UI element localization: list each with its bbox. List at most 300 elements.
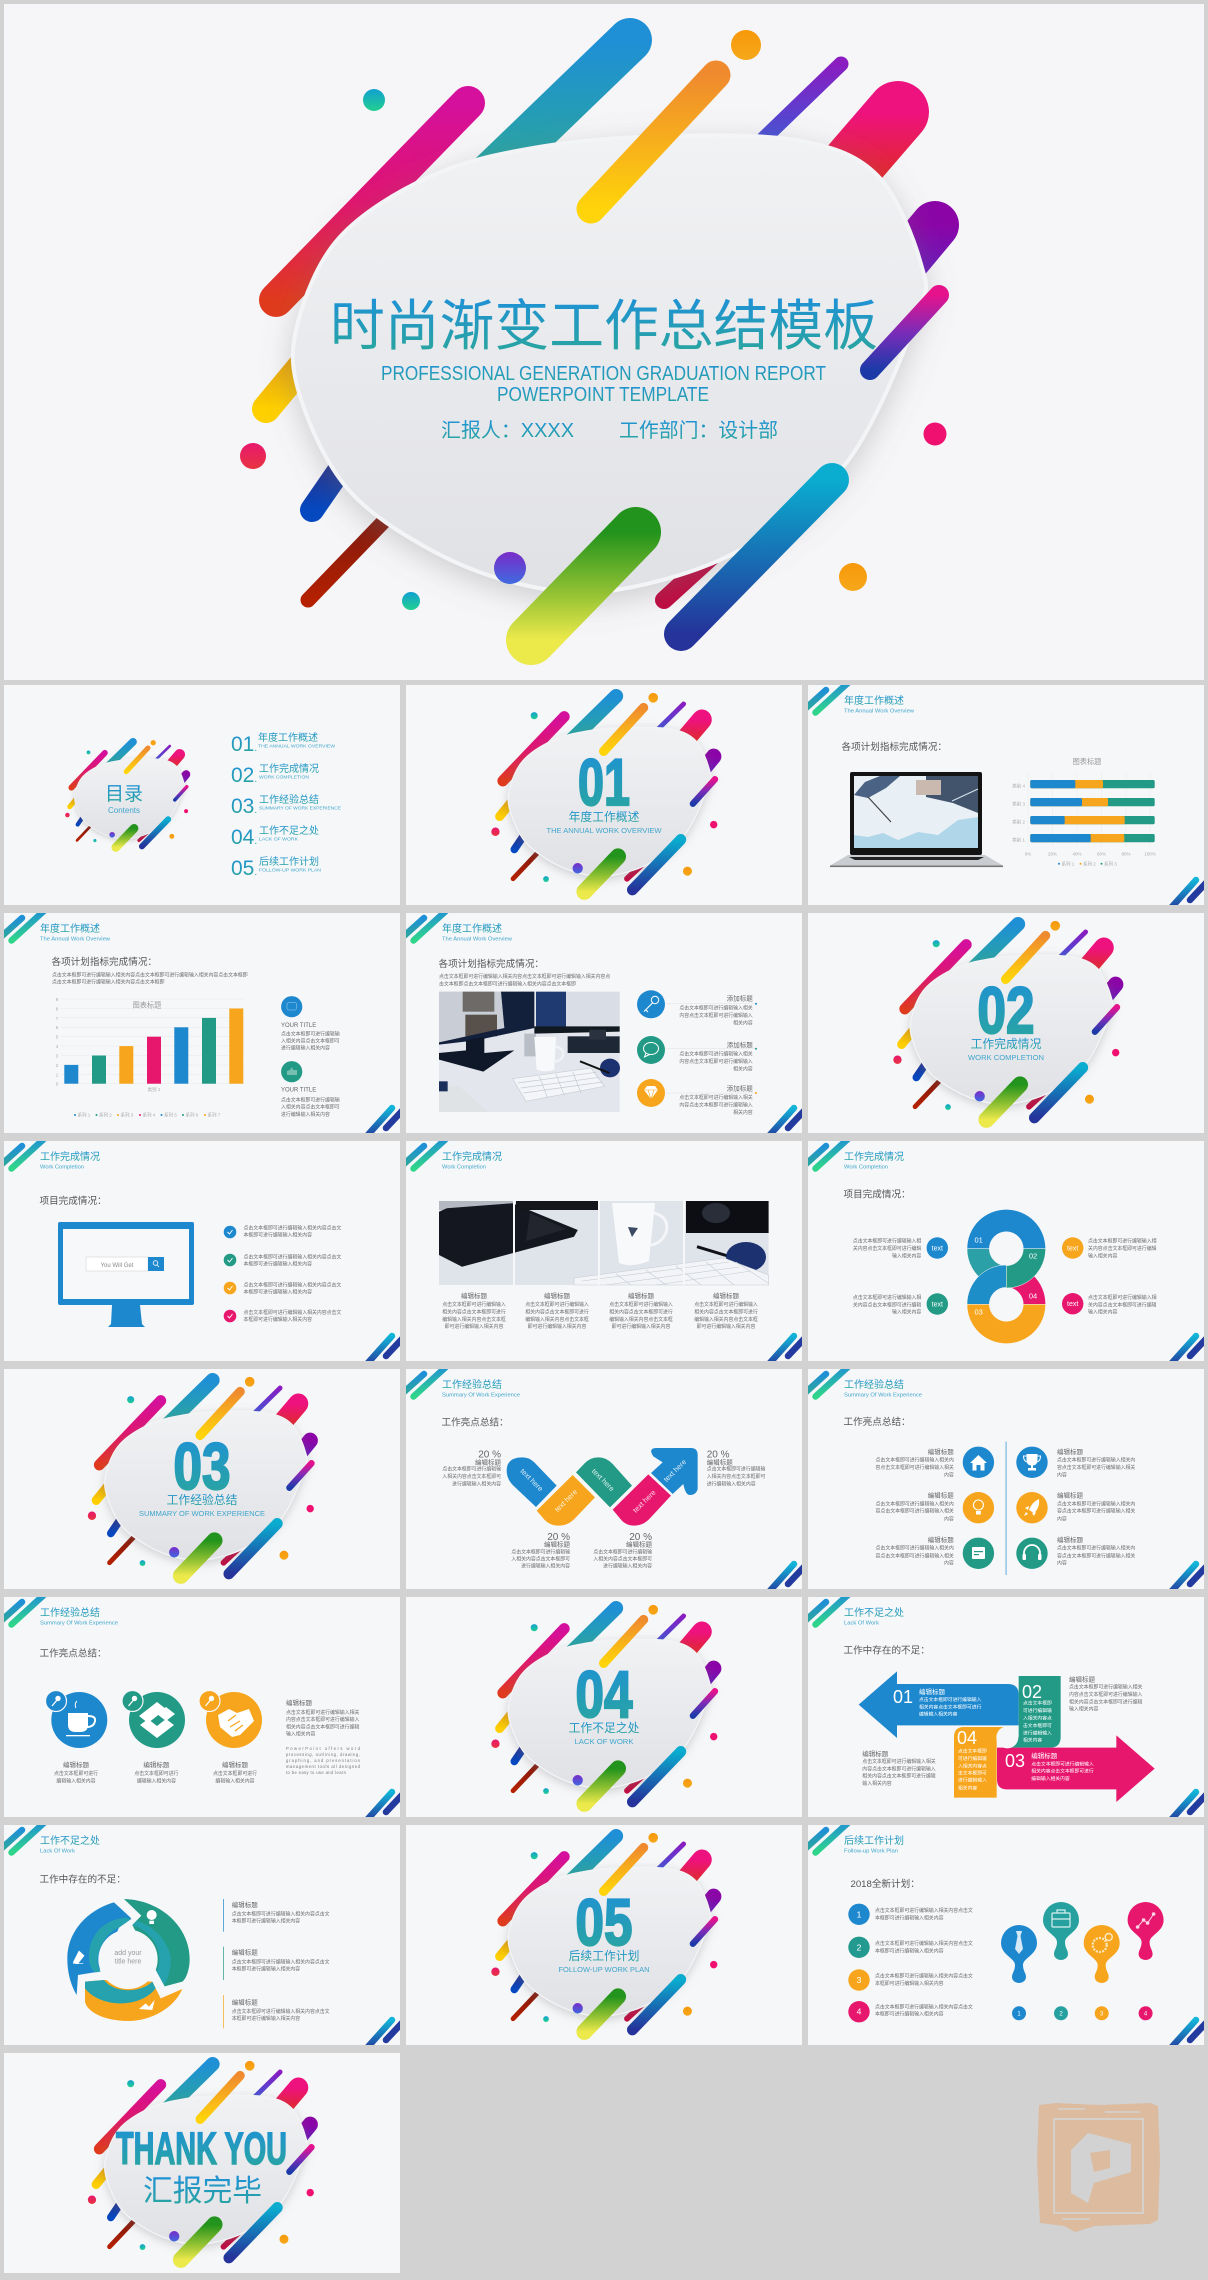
callout: bottom left: text	[932, 1302, 943, 1308]
text block: your title 2: YOUR TITLE	[281, 1088, 316, 1094]
footer stripes	[366, 1792, 402, 1821]
header text	[40, 1606, 118, 1626]
caption column 4	[694, 1291, 758, 1330]
cover subtitle line 1: PROFESSIONAL GENERATION GRADUATION REPORT	[381, 363, 826, 385]
intro text: 点击文本框即可进行编辑输入相关内容点击文本框即	[52, 979, 165, 986]
header text	[844, 1606, 904, 1626]
item 3: diamond icon and text: 点击文本框即可进行编辑输入相关	[679, 1094, 753, 1101]
item 3: diamond icon and text: 添加标题	[727, 1083, 753, 1092]
footer stripes	[366, 1108, 402, 1137]
icon: open box with key badge	[122, 1690, 185, 1748]
interlocking arrows	[859, 1671, 1155, 1802]
plan item 3: 3	[857, 1975, 862, 1985]
balloon 1: tie	[1001, 1925, 1037, 1983]
figure eight ring chart	[967, 1209, 1046, 1344]
plan item 1: 本框即可进行编辑输入相关内容	[875, 1914, 944, 1921]
callout: bottom 20%	[511, 1532, 570, 1570]
section subtitle: FOLLOW-UP WORK PLAN	[558, 1965, 650, 1974]
footer stripes	[768, 1564, 804, 1593]
panel: cycle diagram slide	[2, 1821, 402, 2049]
header text: Work Completion	[844, 1164, 888, 1170]
header text: Work Completion	[40, 1164, 84, 1170]
monitor with search box: You Will Get	[101, 1263, 134, 1269]
panel: figure eight slide	[806, 1137, 1206, 1365]
text block: your title 2	[281, 1088, 340, 1118]
text block 2: 本框即可进行编辑输入相关内容	[232, 1965, 300, 1972]
item 1: key icon and text: 内容点击文本框即可进行编辑输入	[679, 1012, 753, 1019]
text block: your title 1	[281, 1023, 340, 1052]
arrow 03 text: 相关内容点击文本框即可进行	[1031, 1768, 1094, 1775]
caption 2: 编辑输入相关内容	[137, 1778, 176, 1784]
checklist items: 点击文本框即可进行编辑输入相关内容点击文	[244, 1224, 341, 1232]
column chart: 5	[56, 1035, 59, 1040]
item right 1: trophy: 点击文本框即可进行编辑输入相关内	[1057, 1457, 1135, 1464]
item left 2: bulb: 点击文本框即可进行编辑输入相关内	[876, 1501, 954, 1508]
callout: top left 20%: 编辑标题	[475, 1457, 502, 1466]
item 3: diamond icon and text: 相关内容	[733, 1109, 753, 1116]
item 2: chat icon and text: 添加标题	[727, 1040, 753, 1049]
heading: 2018全新计划：	[850, 1878, 920, 1890]
stacked bar chart	[1012, 773, 1156, 868]
callout: bottom right: 输入相关内容	[1088, 1309, 1117, 1316]
text block lower left	[862, 1749, 936, 1787]
W-shaped arrow diagram: text here	[553, 1487, 579, 1514]
contents list: 01.	[231, 733, 257, 756]
center divider	[1005, 1442, 1007, 1575]
contents list: FOLLOW-UP WORK PLAN	[259, 868, 321, 872]
item right 2: rocket: 内容	[1057, 1516, 1067, 1523]
stacked bar chart: 系列 2	[1083, 860, 1096, 868]
caption 3: 点击文本框即可进行	[213, 1770, 257, 1777]
right text block	[286, 1698, 359, 1738]
column chart: 4	[56, 1044, 59, 1049]
stacked bar chart: 80%	[1121, 852, 1131, 857]
panel: column chart slide	[2, 909, 402, 1137]
column chart: 9	[56, 997, 59, 1002]
panel: section 05	[406, 1825, 802, 2045]
callout: bottom left	[853, 1293, 948, 1316]
text block 1: 本框即可进行编辑输入相关内容	[232, 1918, 300, 1925]
text block upper right: 编辑标题	[1069, 1675, 1096, 1684]
footer stripes	[1170, 1336, 1206, 1365]
right text block: 内容点击文本框即可进行编辑输入	[286, 1716, 359, 1723]
header text: Lack Of Work	[844, 1620, 879, 1626]
caption 2: 点击文本框即可进行	[134, 1770, 179, 1777]
item left 3: calendar: 容点击文本框即可进行编辑输入相关	[876, 1552, 954, 1559]
right text block: 编辑标题	[286, 1698, 312, 1707]
callout: bottom right	[1062, 1293, 1157, 1316]
panel: six icons slide	[806, 1365, 1206, 1593]
arrow 01 text: 编辑标题	[919, 1687, 946, 1696]
checklist items: 点击文本框即可进行编辑输入相关内容点击文	[244, 1282, 341, 1288]
cover title: 时尚渐变工作总结模板	[330, 295, 878, 357]
panel 04 text: 入相关内容点	[958, 1762, 987, 1769]
panel: 2018 plan slide	[806, 1821, 1206, 2049]
text block upper right: 点击文本框即可进行编辑输入相关	[1069, 1684, 1142, 1691]
contents heading: Contents	[108, 806, 140, 815]
callout: top right	[1062, 1237, 1157, 1259]
text block lower left: 相关内容点击文本框即可进行编辑	[862, 1773, 936, 1780]
callout: top right 20%: 点击文本框即可进行编辑输	[707, 1466, 765, 1473]
contents list: SUMMARY OF WORK EXPERIENCE	[259, 806, 341, 810]
column chart: 系列 2	[99, 1112, 112, 1118]
caption column 4: 即可进行编辑输入相关内容	[697, 1323, 755, 1330]
column chart: 系列 6	[186, 1112, 199, 1118]
panel: annual overview with laptop and stacked bars	[806, 681, 1206, 909]
header text: The Annual Work Overview	[40, 936, 110, 942]
item 2: chat icon and text: 点击文本框即可进行编辑输入相关	[679, 1051, 753, 1058]
heading: 各项计划指标完成情况：	[438, 958, 544, 970]
plan item 2	[848, 1937, 973, 1958]
caption column 2: 编辑输入相关内容点击文本框	[525, 1316, 589, 1323]
column chart: 1	[56, 1072, 59, 1077]
panel 02 text: 点击文本框即	[1023, 1700, 1052, 1707]
plan item 4	[848, 2001, 973, 2022]
text block lower left: 内容点击文本框即可进行编辑输入	[862, 1765, 936, 1772]
item right 1: trophy: 容点击文本框即可进行编辑输入相关	[1057, 1464, 1135, 1471]
plan item 2: 2	[857, 1942, 862, 1952]
W-shaped arrow diagram: text here	[662, 1457, 688, 1484]
callout: top right: 输入相关内容	[1088, 1252, 1117, 1259]
header text	[844, 1378, 922, 1398]
W-shaped arrow diagram	[507, 1448, 698, 1526]
arrow 01 text: 编辑输入相关内容	[919, 1711, 958, 1718]
footer stripes	[1170, 1564, 1206, 1593]
plan item 3: 本框即可进行编辑输入相关内容	[875, 1980, 944, 1987]
callout: top left	[853, 1237, 948, 1259]
header stripes	[2, 909, 46, 940]
header stripes	[806, 1137, 850, 1168]
ring segment numbers: 04	[1029, 1292, 1037, 1300]
item left 2: bulb	[876, 1491, 994, 1523]
contents list: 05.	[231, 857, 257, 880]
panel 02 text	[1022, 1682, 1052, 1744]
plan item 2: 本框即可进行编辑输入相关内容	[875, 1947, 944, 1954]
right text block: 点击文本框即可进行编辑输入相关	[286, 1709, 359, 1716]
column chart: 2	[56, 1063, 59, 1068]
callout: bottom 20% second	[593, 1532, 652, 1570]
contents list: 工作经验总结	[259, 793, 319, 806]
W-shaped arrow diagram: text here	[631, 1488, 657, 1514]
column chart: 系列 5	[164, 1112, 177, 1118]
item 3: diamond icon and text	[637, 1079, 757, 1116]
item 1: key icon and text	[637, 990, 757, 1027]
callout: top right 20%: 入相关内容点击文本框即可	[707, 1473, 765, 1480]
monitor with search box	[58, 1222, 194, 1327]
header stripes	[404, 1365, 448, 1396]
balloon 3: gears	[1084, 1925, 1120, 1983]
section artwork	[88, 1377, 314, 1576]
item left 1: home: 点击文本框即可进行编辑输入相关内	[876, 1457, 954, 1464]
laptop photo mockup	[830, 772, 1003, 867]
item 2: chat icon and text	[637, 1036, 757, 1072]
callout: top right 20%	[707, 1449, 765, 1487]
item 3: diamond icon and text: 内容点击文本框即可进行编辑输入	[679, 1101, 753, 1108]
contents list: WORK COMPLETION	[259, 774, 309, 780]
column chart: 7	[56, 1016, 59, 1021]
ring segment numbers: 02	[1029, 1252, 1037, 1260]
checklist items: 本框即可进行编辑输入相关内容	[244, 1260, 312, 1268]
callout: top right 20%: 编辑标题	[707, 1457, 733, 1466]
header text: Lack Of Work	[40, 1848, 75, 1854]
panel 04 text: 04	[957, 1728, 977, 1748]
checklist items: 点击文本框即可进行编辑输入相关内容点击文	[244, 1254, 341, 1260]
callout: top left: 点击文本框即可进行编辑输入相	[853, 1238, 921, 1245]
section title: 年度工作概述	[569, 810, 640, 824]
plan item 3: 点击文本框即可进行编辑输入相关内容点击文	[875, 1973, 973, 1980]
header stripes	[2, 1593, 46, 1624]
panel 02 text: 02	[1022, 1682, 1042, 1702]
contents list: 年度工作概述	[258, 731, 318, 744]
W-shaped arrow diagram: text here	[590, 1467, 616, 1493]
text block: your title 2: 点击文本框即可进行编辑输	[281, 1096, 340, 1103]
callout: bottom 20% second: 编辑标题	[626, 1540, 652, 1549]
closing text: 汇报完毕	[143, 2175, 262, 2208]
callout: bottom 20%: 点击文本框即可进行编辑输	[511, 1548, 570, 1555]
heading: 工作中存在的不足：	[40, 1873, 126, 1885]
item right 2: rocket: 点击文本框即可进行编辑输入相关内	[1057, 1501, 1135, 1508]
section title: 工作不足之处	[569, 1721, 640, 1735]
item left 1: home: 内容	[944, 1471, 954, 1478]
callout: top right 20%: 进行编辑输入相关内容	[707, 1480, 756, 1487]
ring segment numbers: 03	[975, 1308, 983, 1316]
caption column 1	[442, 1291, 506, 1330]
item right 3: headphones: 容点击文本框即可进行编辑输入相关	[1057, 1552, 1135, 1559]
text block upper right: 输入相关内容	[1069, 1706, 1098, 1713]
item right 3: headphones: 点击文本框即可进行编辑输入相关内	[1057, 1545, 1135, 1552]
text block upper right: 相关内容点击文本框即可进行编辑	[1069, 1698, 1142, 1705]
text block 2: 编辑标题	[232, 1948, 258, 1957]
icon: chat circle	[281, 996, 302, 1017]
text block: your title 1: 进行编辑输入相关内容	[281, 1045, 330, 1052]
text block 3: 点击文本框即可进行编辑输入相关内容点击文	[232, 2008, 330, 2015]
stacked bar chart: 类别 1	[1012, 836, 1025, 844]
text block: your title 2: 入相关内容点击文本框即可	[281, 1103, 340, 1110]
header text	[844, 1150, 904, 1170]
text block 1: 点击文本框即可进行编辑输入相关内容点击文	[232, 1911, 330, 1918]
text block: your title 2: 进行编辑输入相关内容	[281, 1111, 330, 1118]
panel: contents slide	[4, 685, 400, 905]
panel: monitor slide	[2, 1137, 402, 1365]
plan item 1	[848, 1904, 973, 1925]
checklist items: 点击文本框即可进行编辑输入相关内容点击文	[244, 1309, 341, 1316]
footer stripes	[1170, 1792, 1206, 1821]
arrow 03 text: 编辑输入相关内容	[1031, 1775, 1070, 1782]
callout: top left 20%: 20 %	[478, 1449, 501, 1460]
panel 04 text: 击文本框即可	[958, 1769, 987, 1776]
stacked bar chart: 100%	[1144, 852, 1156, 857]
arrow 03 text: 点击文本框即可进行编辑输入	[1031, 1760, 1094, 1767]
stacked bar chart: 系列 3	[1104, 860, 1117, 868]
panel 02 text: 进行编辑输入	[1023, 1729, 1052, 1736]
column chart: 3	[56, 1054, 59, 1059]
heading: 工作亮点总结：	[442, 1417, 509, 1429]
caption column 1: 点击文本框即可进行编辑输入	[442, 1301, 506, 1308]
column chart: 类别 1	[148, 1086, 161, 1093]
icon: coffee cup with key badge	[46, 1690, 107, 1748]
panel 02 text: 可进行编辑输	[1023, 1707, 1052, 1714]
caption column 1: 编辑输入相关内容点击文本框	[442, 1316, 506, 1323]
callout: bottom 20%: 进行编辑输入相关内容	[521, 1563, 570, 1570]
panel 04 text: 点击文本框即	[958, 1748, 987, 1755]
header text	[442, 1378, 520, 1398]
caption column 3: 点击文本框即可进行编辑输入	[609, 1301, 673, 1308]
contents heading: 目录	[105, 784, 143, 805]
contents list: 02.	[231, 764, 257, 787]
item left 3: calendar: 点击文本框即可进行编辑输入相关内	[876, 1545, 954, 1552]
item left 2: bulb: 容点击文本框即可进行编辑输入相关	[876, 1508, 954, 1515]
stacked bar chart: 0%	[1025, 852, 1031, 857]
header text: 工作经验总结	[844, 1378, 904, 1391]
callout: bottom 20%: 20 %	[547, 1532, 570, 1543]
contents heading	[105, 784, 143, 815]
item left 2: bulb: 编辑标题	[928, 1491, 954, 1500]
header text: 工作不足之处	[40, 1834, 100, 1847]
callout: top left: text	[932, 1246, 943, 1252]
panel: thank you slide	[4, 2053, 400, 2273]
header text: 年度工作概述	[40, 922, 100, 935]
plan item 1: 1	[857, 1909, 862, 1919]
arrow 01 text: 点击文本框即可进行编辑输入	[919, 1696, 982, 1703]
header text: 工作不足之处	[844, 1606, 904, 1619]
text block lower left: 输入相关内容	[862, 1780, 892, 1787]
header text: 工作经验总结	[442, 1378, 502, 1391]
caption column 1: 即可进行编辑输入相关内容	[445, 1323, 503, 1330]
header text: 工作完成情况	[442, 1150, 502, 1163]
cycle arrows diagram: title here	[115, 1959, 142, 1966]
header text	[442, 922, 512, 942]
header text: 工作经验总结	[40, 1606, 100, 1619]
text block upper right	[1069, 1675, 1142, 1713]
caption 3: 编辑输入相关内容	[215, 1778, 255, 1784]
panel: section 03	[4, 1369, 400, 1589]
caption column 1: 相关内容点击文本框即可进行	[442, 1308, 506, 1316]
text block 3: 编辑标题	[232, 1998, 258, 2007]
header stripes	[806, 1821, 850, 1852]
section number: 04	[576, 1657, 633, 1731]
right text block: 相关内容点击文本框即可进行编辑	[286, 1723, 359, 1730]
stacked bar chart: 40%	[1072, 852, 1082, 857]
panel 04 text: 可进行编辑输	[958, 1755, 987, 1762]
item 1: key icon and text: 点击文本框即可进行编辑输入相关	[679, 1005, 753, 1012]
item right 3: headphones	[1016, 1535, 1135, 1569]
panel 04 text: 相关内容	[958, 1784, 977, 1791]
panel 04 text	[957, 1728, 987, 1791]
callout: bottom left: 输入相关内容	[892, 1309, 921, 1316]
item 1: key icon and text: 添加标题	[727, 994, 753, 1003]
header stripes	[404, 1137, 448, 1168]
intro text: 击文本框即点击文本框即可进行编辑输入相关内容点击文本框即	[439, 980, 576, 987]
item right 1: trophy: 编辑标题	[1057, 1447, 1084, 1456]
intro text: 点击文本框即可进行编辑输入相关内容点击文本框即可进行编辑输入相关内容点击文本框即	[52, 972, 248, 979]
item 2: chat icon and text: 相关内容	[733, 1065, 753, 1072]
callout: top right 20%: 20 %	[707, 1449, 730, 1460]
footer stripes	[768, 1108, 804, 1137]
item left 2: bulb: 内容	[944, 1516, 954, 1523]
english paragraph: management tools all designed	[286, 1764, 361, 1769]
caption 2	[134, 1760, 179, 1784]
column chart: 8	[56, 1006, 59, 1011]
text block 3	[223, 1995, 330, 2028]
photo: desk with monitors, mug and keyboard	[439, 992, 620, 1112]
panel 02 text: 击文本框即可	[1023, 1722, 1052, 1729]
item right 2: rocket: 编辑标题	[1057, 1491, 1084, 1500]
header stripes	[404, 909, 448, 940]
heading: 项目完成情况：	[844, 1189, 911, 1201]
panel: W arrow slide	[404, 1365, 804, 1593]
photo strip: desk close-up	[439, 1201, 769, 1285]
panel 04 text: 进行编辑输入	[958, 1777, 987, 1784]
plan item 3	[848, 1969, 973, 1991]
checklist items	[224, 1224, 341, 1323]
english paragraph: graphing, and presentation	[286, 1758, 361, 1763]
caption column 3: 即可进行编辑输入相关内容	[612, 1323, 670, 1330]
checklist items: 本框即可进行编辑输入相关内容	[244, 1232, 312, 1238]
cycle arrows diagram	[67, 1899, 190, 2021]
caption 1: 编辑标题	[63, 1760, 90, 1769]
callout: bottom left: 关内容点击文本框即可进行编辑	[853, 1301, 921, 1308]
text block: your title 1: 入相关内容点击文本框即可	[281, 1037, 340, 1044]
column chart: 系列 3	[120, 1112, 134, 1118]
stacked bar chart: 类别 4	[1012, 782, 1025, 790]
text block lower left: 点击文本框即可进行编辑输入相关	[862, 1758, 936, 1765]
W-shaped arrow diagram: text here	[519, 1467, 545, 1493]
header text: Summary Of Work Experience	[40, 1620, 118, 1626]
item right 3: headphones: 编辑标题	[1057, 1535, 1084, 1544]
section number: 02	[978, 973, 1034, 1047]
balloon 2: briefcase	[1043, 1902, 1079, 1960]
contents list: 后续工作计划	[259, 855, 319, 868]
section subtitle: LACK OF WORK	[574, 1737, 634, 1746]
number dots row: 3	[1100, 2012, 1104, 2018]
item right 1: trophy	[1016, 1447, 1135, 1478]
section artwork	[491, 693, 717, 892]
header text: Work Completion	[442, 1164, 486, 1170]
caption column 4: 相关内容点击文本框即可进行	[694, 1308, 758, 1316]
header text: 年度工作概述	[844, 694, 904, 707]
plan item 4: 点击文本框即可进行编辑输入相关内容点击文	[875, 2004, 973, 2011]
reporter: 汇报人：XXXX	[441, 419, 574, 442]
text block 2	[223, 1947, 330, 1980]
number dots row: 2	[1059, 2012, 1063, 2018]
watermark stamp	[1037, 2103, 1160, 2232]
section title: 后续工作计划	[569, 1949, 639, 1963]
header text	[844, 694, 914, 714]
text block upper right: 内容点击文本框即可进行编辑输入	[1069, 1691, 1142, 1698]
cycle arrows diagram: add your	[114, 1950, 142, 1957]
section number: 01	[578, 745, 630, 819]
header stripes	[806, 681, 850, 712]
header text: 年度工作概述	[442, 922, 502, 935]
panel: cover slide	[4, 4, 1204, 680]
contents list	[231, 731, 341, 880]
callout: bottom 20%: 入相关内容点击文本框即可	[511, 1555, 570, 1562]
heading: 项目完成情况：	[40, 1195, 107, 1207]
thank you artwork	[88, 2061, 314, 2260]
callout: top left 20%: 点击文本框即可进行编辑输	[442, 1466, 501, 1473]
column chart: 0	[56, 1082, 59, 1087]
contents list: 03.	[231, 795, 257, 818]
text block: your title 1: 点击文本框即可进行编辑输	[281, 1030, 340, 1037]
stacked bar chart: 类别 3	[1012, 800, 1025, 808]
caption column 3: 相关内容点击文本框即可进行	[609, 1308, 673, 1316]
section subtitle: WORK COMPLETION	[968, 1053, 1044, 1062]
item left 1: home: 容点击文本框即可进行编辑输入相关	[876, 1464, 954, 1471]
chart title: 图表标题	[1073, 757, 1101, 766]
callout: top left: 输入相关内容	[892, 1252, 921, 1259]
panel: section 01	[406, 685, 802, 905]
contents list: LACK OF WORK	[259, 836, 299, 842]
